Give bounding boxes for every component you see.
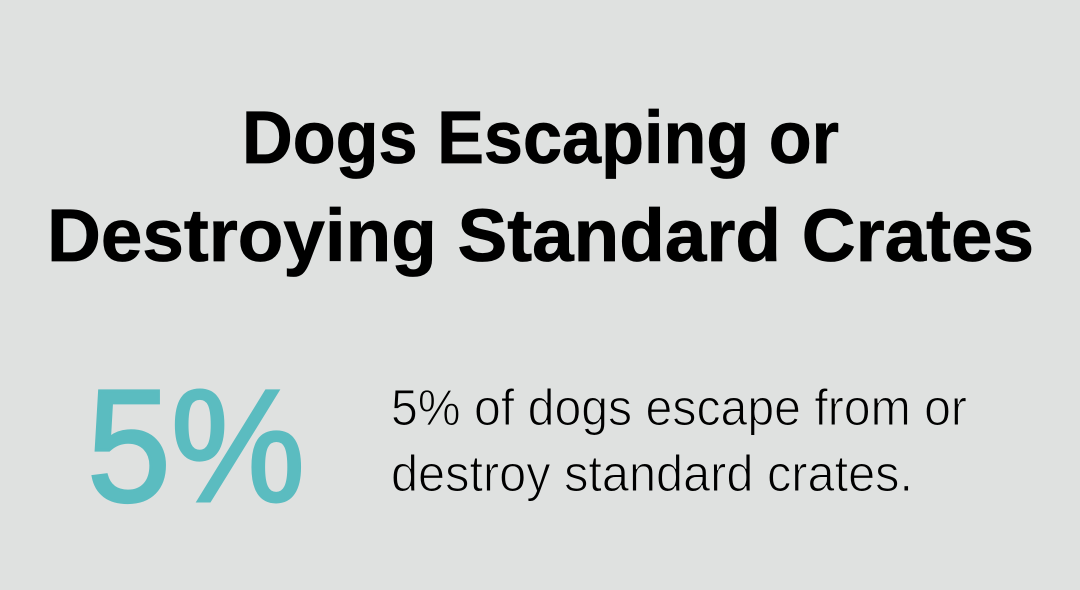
title [47, 96, 1034, 277]
big stat: 5%: 5% [87, 356, 305, 535]
description text: destroy standard crates. [391, 445, 913, 502]
title: Dogs Escaping or [242, 96, 839, 179]
title: Destroying Standard Crates [47, 194, 1034, 277]
description text: 5% of dogs escape from or [391, 379, 967, 436]
description text [391, 379, 967, 502]
